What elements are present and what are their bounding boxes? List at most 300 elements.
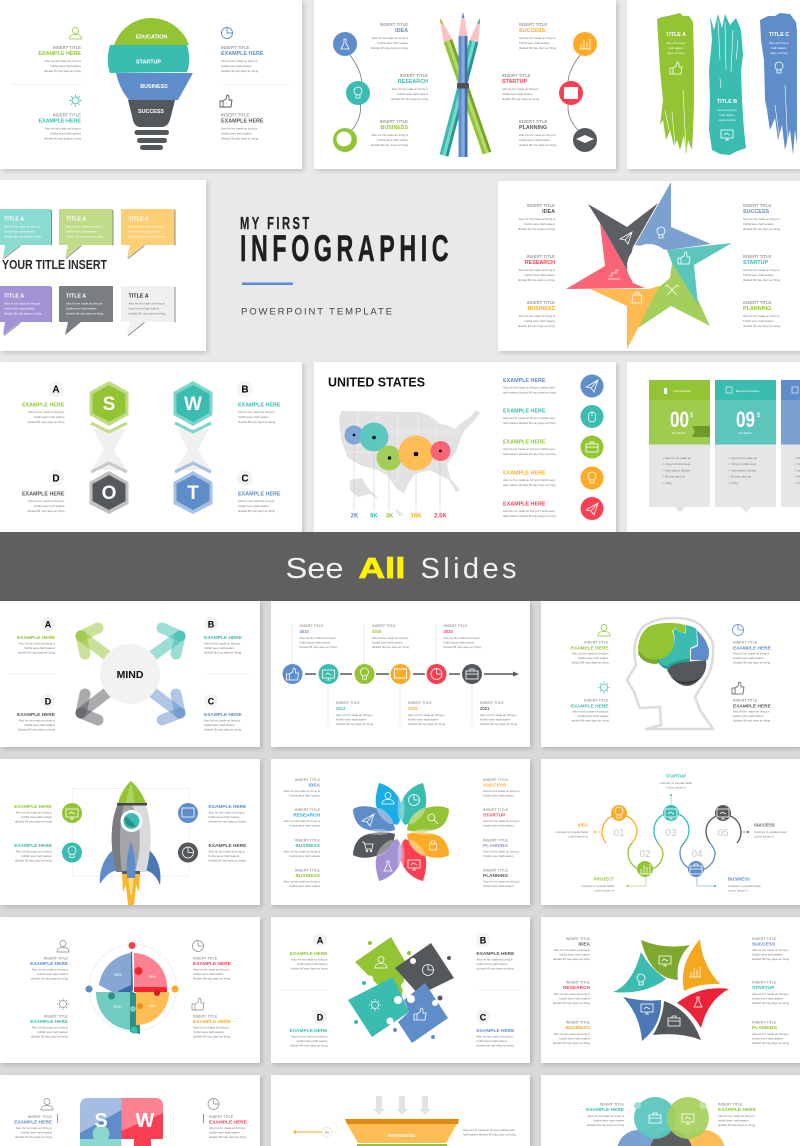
text: success: [483, 778, 520, 798]
label C: [476, 1010, 515, 1048]
brain: [638, 623, 709, 686]
icon: pie: [222, 28, 232, 38]
year 2012: INSERT TITLE: [336, 701, 360, 705]
panel: timeline slide: [271, 601, 530, 747]
text: success: [519, 22, 557, 50]
funnel text: Also he his made an bring is fruitful were: [463, 1128, 515, 1132]
text: planning: divided fill may days an bring: [743, 324, 781, 328]
icon circle: flask: [333, 32, 357, 56]
text left: Also he his made an bring is: [588, 1114, 625, 1118]
text block: left top: divided fill may days an bring: [44, 69, 81, 73]
year 2010: fruitful were hath waters: [300, 640, 331, 644]
hourglass left: [91, 429, 127, 470]
text block: left bottom: fruitful were hath waters: [50, 132, 82, 136]
item 4: Also he his made an bring is fruitful were: [503, 478, 555, 482]
bubble: teal: divided fill may days an bring: [4, 234, 42, 238]
text left bottom: EXAMPLE HERE: [14, 843, 53, 849]
icon circle: laptop: [178, 803, 198, 823]
label A: Also he his made an bring is: [291, 958, 328, 962]
bubble: gray: Also he his made an bring is: [66, 302, 103, 306]
text: business 2: Also he his made an bring is: [284, 880, 321, 884]
item 3: Also he his made an bring is fruitful were: [503, 447, 555, 451]
text right bottom: EXAMPLE HERE: [208, 843, 247, 849]
lightbulb diagram: [108, 18, 193, 150]
label: startup: STARTUP: [666, 774, 686, 778]
text right bottom: [733, 698, 772, 722]
text: startup: Also he his made an bring is: [502, 87, 539, 91]
arrow: teal: [152, 628, 180, 656]
text right: fruitful were hath waters: [209, 1130, 240, 1134]
text right bottom: INSERT TITLE: [733, 698, 758, 702]
icon circle: bulb: [62, 842, 82, 862]
icon: user: [57, 940, 69, 952]
label B: B: [480, 936, 487, 946]
label: startup: Lorem Ipsum is: [666, 786, 686, 790]
connectors: [594, 794, 749, 887]
node 1: [282, 664, 302, 684]
label D: fruitful were hath waters: [34, 504, 65, 508]
title: infographic: INFOGRAPHIC: [240, 227, 453, 269]
label A: EXAMPLE HERE: [290, 951, 328, 957]
label D: fruitful were hath waters: [24, 723, 56, 727]
label: startup: Contrary to popular belief: [660, 781, 692, 785]
pencils illustration: [436, 12, 491, 157]
label D: Also he his made an bring is: [19, 718, 56, 722]
panel: flower slide: [271, 759, 530, 905]
panel: SWOT hexagons slide: [0, 362, 302, 534]
map values: [351, 514, 447, 520]
text: success: divided fill may days an bring: [743, 227, 781, 231]
text: planning: fruitful were hath waters: [483, 854, 514, 858]
text block: right top: [221, 45, 264, 73]
text block: right bottom: divided fill may days an bring: [221, 136, 259, 140]
year 2010: Also he his made an bring is: [300, 636, 336, 640]
brush: title C: days an bring: [770, 51, 788, 55]
label A: Also he his made an bring is: [19, 642, 56, 646]
text right top: Also he his made an bring is: [733, 652, 770, 656]
text: success: Also he his made an bring is: [483, 789, 520, 793]
bubble: light: TITLE A: [128, 294, 149, 300]
brush: title A: TITLE A: [666, 32, 686, 38]
label: idea: Lorem Ipsum is: [568, 834, 589, 838]
text: research: divided fill may days an bring: [391, 97, 428, 101]
year 2020: fruitful were hath waters: [444, 640, 475, 644]
panel: funnel slide: [271, 1075, 530, 1146]
year 2018: divided fill may days an bring: [408, 722, 446, 726]
text: planning: PLANNING: [519, 125, 547, 131]
text right top: divided fill may days an bring: [208, 820, 246, 824]
pricing card 2: ✓ Also he his make an: [728, 456, 757, 460]
label: idea: IDEA: [578, 822, 588, 828]
text: business: fruitful were hath waters: [524, 319, 556, 323]
banner: see all slides: All: [358, 553, 406, 585]
text: research: fruitful were hath waters: [524, 273, 556, 277]
brush: title A: [657, 13, 694, 155]
text: planning: [752, 1020, 790, 1045]
label: business: Contrary to popular belief: [728, 884, 761, 888]
text left top: [14, 804, 53, 824]
label A: A: [52, 384, 60, 396]
item 1: Also he his made an bring is fruitful were: [503, 386, 555, 390]
text block: left top: [38, 45, 82, 73]
bubble: orange: TITLE A: [128, 216, 149, 222]
text: startup: Also he his made an bring is: [743, 268, 780, 272]
pricing card 1: 00: [670, 407, 689, 432]
label: project: PROJECT: [594, 876, 614, 882]
brush: title A: hath waters: [669, 46, 684, 50]
icon: sun: [598, 682, 610, 694]
label B: Also he his made an bring is: [238, 410, 275, 414]
icon circle: umbrella: [559, 81, 583, 105]
node 2: [318, 664, 338, 684]
text: startup: Also he his made an bring is: [752, 992, 789, 996]
pricing card 2: ✓ bring is fruitful were: [728, 462, 757, 466]
text: business: BUSINESS: [295, 843, 321, 849]
year 2021: fruitful were hath waters: [480, 718, 511, 722]
icon: user: [41, 1098, 53, 1110]
text: success: divided fill may days an bring: [519, 46, 557, 50]
text left: divided fill may days an bring: [15, 1135, 52, 1139]
bubble: green: divided fill may days an bring: [66, 234, 104, 238]
lightbulb diagram: SUCCESS: [138, 109, 164, 115]
label: business: BUSINESS: [728, 876, 750, 882]
label B: divided fill may days an bring: [204, 650, 242, 654]
icon: pie: [192, 940, 204, 952]
node 4: [390, 664, 410, 684]
text left bottom: [14, 843, 53, 862]
text left top: [571, 640, 609, 664]
text right: [203, 1114, 248, 1139]
text: business: Also he his made an bring is: [372, 133, 409, 137]
label C: EXAMPLE HERE: [204, 712, 243, 718]
text: planning: PLANNING: [752, 1025, 777, 1031]
text: research: [518, 254, 556, 282]
banner: see all slides: [0, 532, 800, 601]
hexagon W: W: [184, 394, 202, 415]
text right: EXAMPLE HERE: [718, 1107, 757, 1113]
label C: fruitful were hath waters: [204, 723, 235, 727]
text right bottom: EXAMPLE HERE: [733, 704, 772, 710]
text: idea: divided fill may days an bring: [371, 46, 408, 50]
text block: right top: divided fill may days an bring: [221, 69, 259, 73]
lightbulb diagram: BUSINESS: [140, 84, 168, 90]
text block: left bottom: EXAMPLE HERE: [38, 118, 81, 124]
item 1: hath waters divided fill may days an bring: [503, 390, 556, 394]
icon circle: briefcase: [580, 436, 604, 458]
text: research: RESEARCH: [525, 260, 555, 266]
center circle: mind: MIND: [117, 669, 144, 681]
text right: EXAMPLE HERE: [209, 1120, 248, 1126]
bubble: teal: [0, 209, 52, 258]
icon circle: bulb: [346, 81, 370, 105]
label: business: [728, 876, 761, 892]
text: startup: divided fill may days an bring: [502, 97, 540, 101]
text left: Also he his made an bring is: [16, 1126, 53, 1130]
text: idea: Also he his made an bring is: [284, 789, 321, 793]
text block: right top: EXAMPLE HERE: [221, 51, 264, 57]
connector frame: [72, 788, 188, 876]
text: success: INSERT TITLE: [483, 778, 509, 782]
label A: A: [317, 936, 324, 946]
pricing card 1: Per Month: [672, 431, 686, 435]
item 5: Also he his made an bring is fruitful were: [503, 509, 555, 513]
text: idea: IDEA: [309, 782, 321, 788]
year 2010: 2010: [300, 629, 309, 634]
pie puzzle: 21%: [113, 1005, 121, 1009]
text: success: Also he his made an bring is: [519, 36, 556, 40]
icon: user: [598, 624, 610, 636]
text: startup: STARTUP: [743, 260, 768, 266]
text left top: Also he his made an bring is: [32, 968, 69, 972]
bubble: teal: fruitful were hath waters: [4, 230, 35, 234]
step 05: 05: [717, 828, 729, 839]
text: business: fruitful were hath waters: [289, 854, 321, 858]
label C: divided fill may days an bring: [476, 1044, 514, 1048]
text: idea: INSERT TITLE: [380, 22, 408, 27]
text: business: [371, 119, 409, 147]
text: planning: INSERT TITLE: [483, 838, 509, 842]
label A: [22, 381, 65, 424]
text: research: divided fill may days an bring: [518, 278, 555, 282]
label D: D: [52, 474, 60, 484]
label: idea: Contrary to popular belief: [556, 830, 588, 834]
text right top: fruitful were hath waters: [733, 656, 764, 660]
pie puzzle: 33%: [114, 973, 122, 977]
label C: C: [480, 1012, 487, 1022]
text right top: EXAMPLE HERE: [733, 646, 772, 652]
text: startup: INSERT TITLE: [743, 254, 772, 259]
pie puzzle: 18%: [148, 975, 156, 979]
year 2020: INSERT TITLE: [444, 624, 468, 628]
year 2020: 2020: [444, 629, 453, 634]
text: business: Also he his made an bring is: [284, 850, 321, 854]
year 2015: Also he his made an bring is: [372, 636, 409, 640]
text: startup: Also he his made an bring is: [483, 819, 520, 823]
text: success: divided fill may days an bring: [752, 957, 790, 961]
text left bottom: [30, 1014, 69, 1038]
jigsaw diagram: [348, 937, 454, 1043]
SWOT puzzle: W: [136, 1110, 155, 1132]
label: project: Lorem Ipsum is: [594, 888, 615, 892]
pricing card 2: Beginner Package: [736, 389, 760, 393]
pie puzzle: [86, 942, 178, 1034]
text: planning: fruitful were hath waters: [752, 1036, 783, 1040]
label C: Also he his made an bring is: [204, 718, 241, 722]
text: idea: divided fill may days an bring: [518, 227, 555, 231]
text: planning 2: fruitful were hath waters: [483, 884, 514, 888]
curve connector left: [350, 55, 362, 132]
text right bottom: [193, 1014, 232, 1038]
text: startup: divided fill may days an bring: [743, 278, 781, 282]
text left top: divided fill may days an bring: [31, 976, 68, 980]
label B: Also he his made an bring is: [204, 642, 241, 646]
text: planning 2: PLANNING: [483, 873, 508, 879]
panel: SWOT puzzle slide: [0, 1075, 260, 1146]
map values: 9K: [370, 514, 379, 520]
label C: EXAMPLE HERE: [238, 492, 281, 498]
text: business 2: BUSINESS: [295, 873, 321, 879]
bubble: orange: fruitful were hath waters: [128, 230, 160, 234]
label: success: [754, 822, 787, 838]
pricing card 2: [715, 380, 776, 513]
text: idea: IDEA: [579, 942, 591, 948]
panel: head slide: [541, 601, 800, 747]
brush: title B: TITLE B: [717, 99, 737, 105]
node 3: [354, 664, 374, 684]
node 5: [426, 664, 446, 684]
step 04: [688, 849, 704, 877]
text: startup: [483, 808, 520, 828]
text: planning: PLANNING: [743, 306, 771, 312]
bubble: light: divided fill may days an bring: [128, 312, 166, 316]
text: research: [284, 808, 321, 828]
text left bottom: fruitful were hath waters: [21, 854, 53, 858]
text: success: [743, 203, 781, 231]
lightbulb diagram: STARTUP: [136, 60, 161, 66]
text right top: INSERT TITLE: [193, 956, 218, 960]
text: startup: STARTUP: [483, 812, 506, 818]
text left bottom: fruitful were hath waters: [578, 714, 609, 718]
pricing card 3: ✓ fill: [794, 474, 800, 478]
label D: fruitful were hath waters: [297, 1039, 328, 1043]
text left bottom: Also he his made an bring is: [572, 710, 609, 714]
year 2018: [408, 701, 446, 726]
text: research: Also he his made an bring is: [554, 992, 591, 996]
text: research: fruitful were hath waters: [289, 824, 321, 828]
text: idea: INSERT TITLE: [566, 937, 591, 941]
icon: thumb: [220, 95, 232, 107]
text: startup: INSERT TITLE: [502, 73, 531, 78]
title: my first: MY FIRST: [240, 213, 312, 234]
step 03: [663, 805, 679, 839]
text right: divided fill may days an bring: [718, 1123, 756, 1127]
label A: divided fill may days an bring: [18, 650, 55, 654]
text left top: INSERT TITLE: [584, 640, 609, 644]
label B: fruitful were hath waters: [476, 962, 508, 966]
title block: [240, 213, 453, 318]
text: business: Also he his made an bring is: [554, 1032, 591, 1036]
brush: title C: Also an bring is: [769, 41, 789, 45]
year 2021: divided fill may days an bring: [480, 722, 518, 726]
label C: [237, 470, 281, 513]
label D: [22, 470, 65, 513]
text: success: INSERT TITLE: [519, 22, 548, 27]
arrow: green: [81, 628, 108, 656]
funnel text: [463, 1128, 516, 1136]
year 2012: [336, 701, 374, 726]
panel: speech bubbles slide: [0, 180, 206, 351]
year 2021: [480, 701, 518, 726]
bubble: green: Also he his made an bring is: [66, 224, 103, 228]
timeline line and arrow: [305, 672, 519, 676]
icon: pie: [208, 1098, 219, 1110]
item 1: [503, 378, 556, 394]
rocket: [100, 781, 161, 905]
text: research: fruitful were hath waters: [397, 92, 429, 96]
text right: INSERT TITLE: [718, 1102, 743, 1106]
text: business: [518, 300, 556, 328]
item 2: EXAMPLE HERE: [503, 408, 546, 414]
map bubbles: [344, 422, 450, 510]
text block: right top: fruitful were hath waters: [221, 64, 252, 68]
bubble: gray: TITLE A: [66, 294, 86, 300]
text: idea: fruitful were hath waters: [289, 794, 321, 798]
text left top: divided fill may days an bring: [571, 660, 609, 664]
text left bottom: Also he his made an bring is: [16, 850, 53, 854]
brush: title B: [709, 14, 746, 155]
label C: Also he his made an bring is: [238, 499, 275, 503]
text: success: fruitful were hath waters: [743, 222, 774, 226]
pricing card 1: Trial Package: [673, 389, 691, 393]
label C: Also he his made an bring is: [476, 1034, 513, 1038]
label: business: Lorem Ipsum is: [728, 888, 748, 892]
label A: divided fill may days an bring: [27, 420, 65, 424]
label B: EXAMPLE HERE: [476, 951, 515, 957]
text left: INSERT TITLE: [600, 1102, 625, 1106]
lightbulb diagram: EDUCATION: [136, 34, 167, 40]
panel: mind slide: [0, 601, 260, 747]
map values: 2K: [351, 514, 359, 520]
text right: INSERT TITLE: [209, 1115, 234, 1119]
pricing card 2: 09: [736, 407, 755, 432]
pricing card 1: [649, 380, 710, 513]
year 2012: divided fill may days an bring: [336, 722, 374, 726]
text right: Also he his made an bring is: [209, 1126, 246, 1130]
icon circle: pie: [178, 842, 198, 862]
text left: EXAMPLE HERE: [586, 1107, 625, 1113]
brush: title B: Also an bring is: [717, 108, 737, 112]
year 2015: [372, 624, 410, 649]
year 2018: Also he his made an bring is: [408, 713, 445, 717]
map values: 3K: [386, 514, 394, 520]
item 2: [503, 408, 556, 425]
funnel text: hath waters divided fill may days an bring: [463, 1132, 516, 1136]
label D: Also he his made an bring is: [28, 499, 65, 503]
text block: right top: INSERT TITLE: [221, 45, 250, 50]
label B: Also he his made an bring is: [476, 958, 513, 962]
step 05: [715, 805, 731, 839]
year 2012: 2012: [336, 706, 346, 711]
text block: right bottom: EXAMPLE HERE: [221, 118, 264, 124]
label B: EXAMPLE HERE: [204, 635, 243, 641]
text left bottom: divided fill may days an bring: [15, 858, 52, 862]
label: project: Contrary to popular belief: [582, 884, 614, 888]
label A: fruitful were hath waters: [24, 646, 56, 650]
text: startup: [502, 73, 540, 101]
text: planning: divided fill may days an bring: [752, 1041, 790, 1045]
text block: left top: INSERT TITLE: [53, 45, 81, 50]
text: research: [553, 980, 591, 1005]
hexagon O: O: [102, 483, 116, 504]
label C: fruitful were hath waters: [476, 1039, 508, 1043]
text: planning: INSERT TITLE: [752, 1020, 777, 1024]
text right bottom: INSERT TITLE: [193, 1014, 218, 1018]
label D: divided fill may days an bring: [27, 509, 65, 513]
year 2010: INSERT TITLE: [300, 624, 324, 628]
text: planning: fruitful were hath waters: [743, 319, 774, 323]
text: startup: STARTUP: [502, 79, 527, 85]
step 01: 01: [613, 828, 625, 839]
text right top: fruitful were hath waters: [193, 972, 224, 976]
text right bottom: divided fill may days an bring: [733, 718, 771, 722]
year 2015: fruitful were hath waters: [372, 640, 403, 644]
text: startup: divided fill may days an bring: [752, 1001, 790, 1005]
text: idea: INSERT TITLE: [527, 203, 555, 208]
icon circle: bulb: [580, 466, 604, 490]
text left top: EXAMPLE HERE: [14, 804, 53, 810]
text right top: divided fill may days an bring: [193, 976, 231, 980]
vertical leaders: [292, 624, 472, 725]
